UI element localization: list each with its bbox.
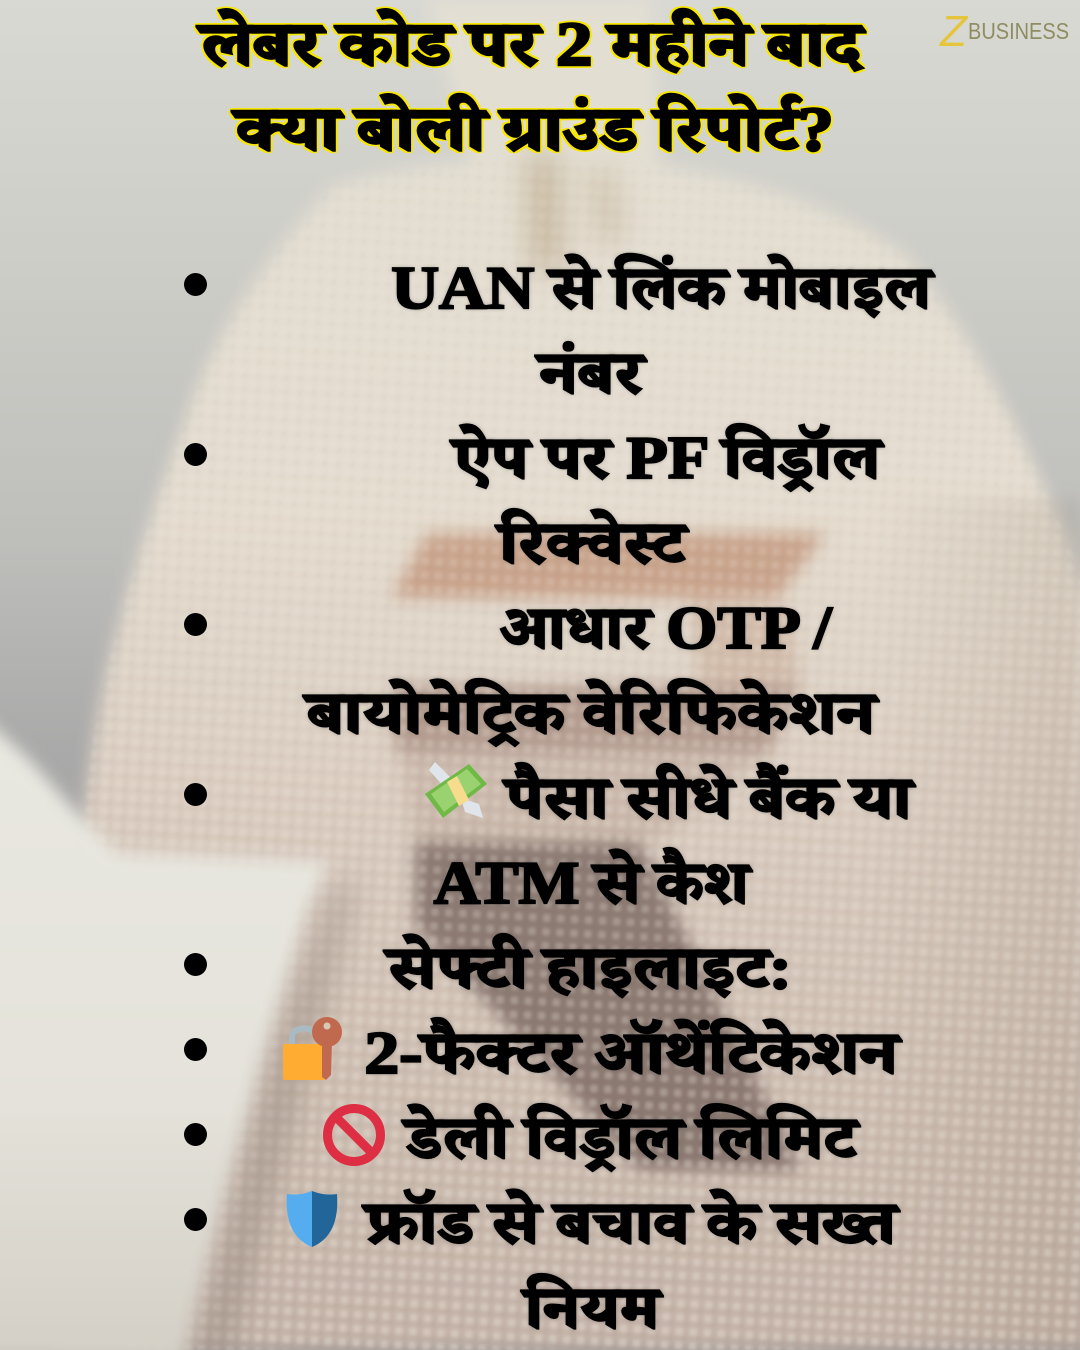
icon: prohibited sign	[323, 1104, 385, 1166]
bullet 5 text: सेफ्टी हाइलाइट:	[388, 935, 792, 1001]
white cloth foreground	[0, 715, 330, 1350]
bullet 2	[184, 443, 207, 466]
bullet 3 text: आधार OTP /	[500, 595, 832, 661]
title	[193, 6, 869, 164]
bullet 1	[184, 273, 207, 296]
bullet 8 text continued: नियम	[525, 1275, 659, 1341]
icon: flying money	[425, 762, 487, 818]
bullet 7 text: डेली विड्रॉल लिमिट	[406, 1105, 856, 1171]
canvas weave texture	[88, 532, 1080, 1350]
bullet 3 text continued: बायोमेट्रिक वेरिफिकेशन	[307, 680, 875, 746]
bullet 7	[184, 1123, 207, 1146]
shadow beside cloth	[195, 880, 355, 1350]
icon: shield	[286, 1191, 338, 1247]
bullet 1 text: UAN से लिंक मोबाइल	[391, 255, 931, 321]
bullet 8 text: फ्रॉड से बचाव के सख्त	[366, 1190, 896, 1256]
bullet 3	[184, 613, 207, 636]
bullet 2 text: ऐप पर PF विड्रॉल	[454, 425, 879, 491]
bullet 6 text: 2-फैक्टर ऑथेंटिकेशन	[364, 1020, 898, 1086]
neck folds of the bag	[525, 155, 625, 275]
title: लेबर कोड पर 2 महीने बाद	[201, 11, 861, 79]
icon: lock and key	[283, 1017, 342, 1080]
bullet 6	[184, 1038, 207, 1061]
bullet 5	[184, 953, 207, 976]
bullet 8	[184, 1208, 207, 1231]
logo: Z Business	[939, 7, 1069, 56]
logo: Z Business: BUSINESS	[968, 18, 1069, 44]
bullet 2 text continued: रिक्वेस्ट	[499, 510, 684, 576]
title: क्या बोली ग्राउंड रिपोर्ट?	[236, 96, 834, 164]
bullet 4 text continued: ATM से कैश	[434, 850, 748, 916]
bullet list	[184, 251, 936, 1341]
logo: Z Business: Z	[940, 7, 967, 56]
bullet 1 text continued: नंबर	[539, 340, 643, 406]
bullet 4	[184, 783, 207, 806]
rupee symbol on bag	[392, 533, 826, 1170]
bullet 4 text: पैसा सीधे बैंक या	[506, 765, 911, 831]
